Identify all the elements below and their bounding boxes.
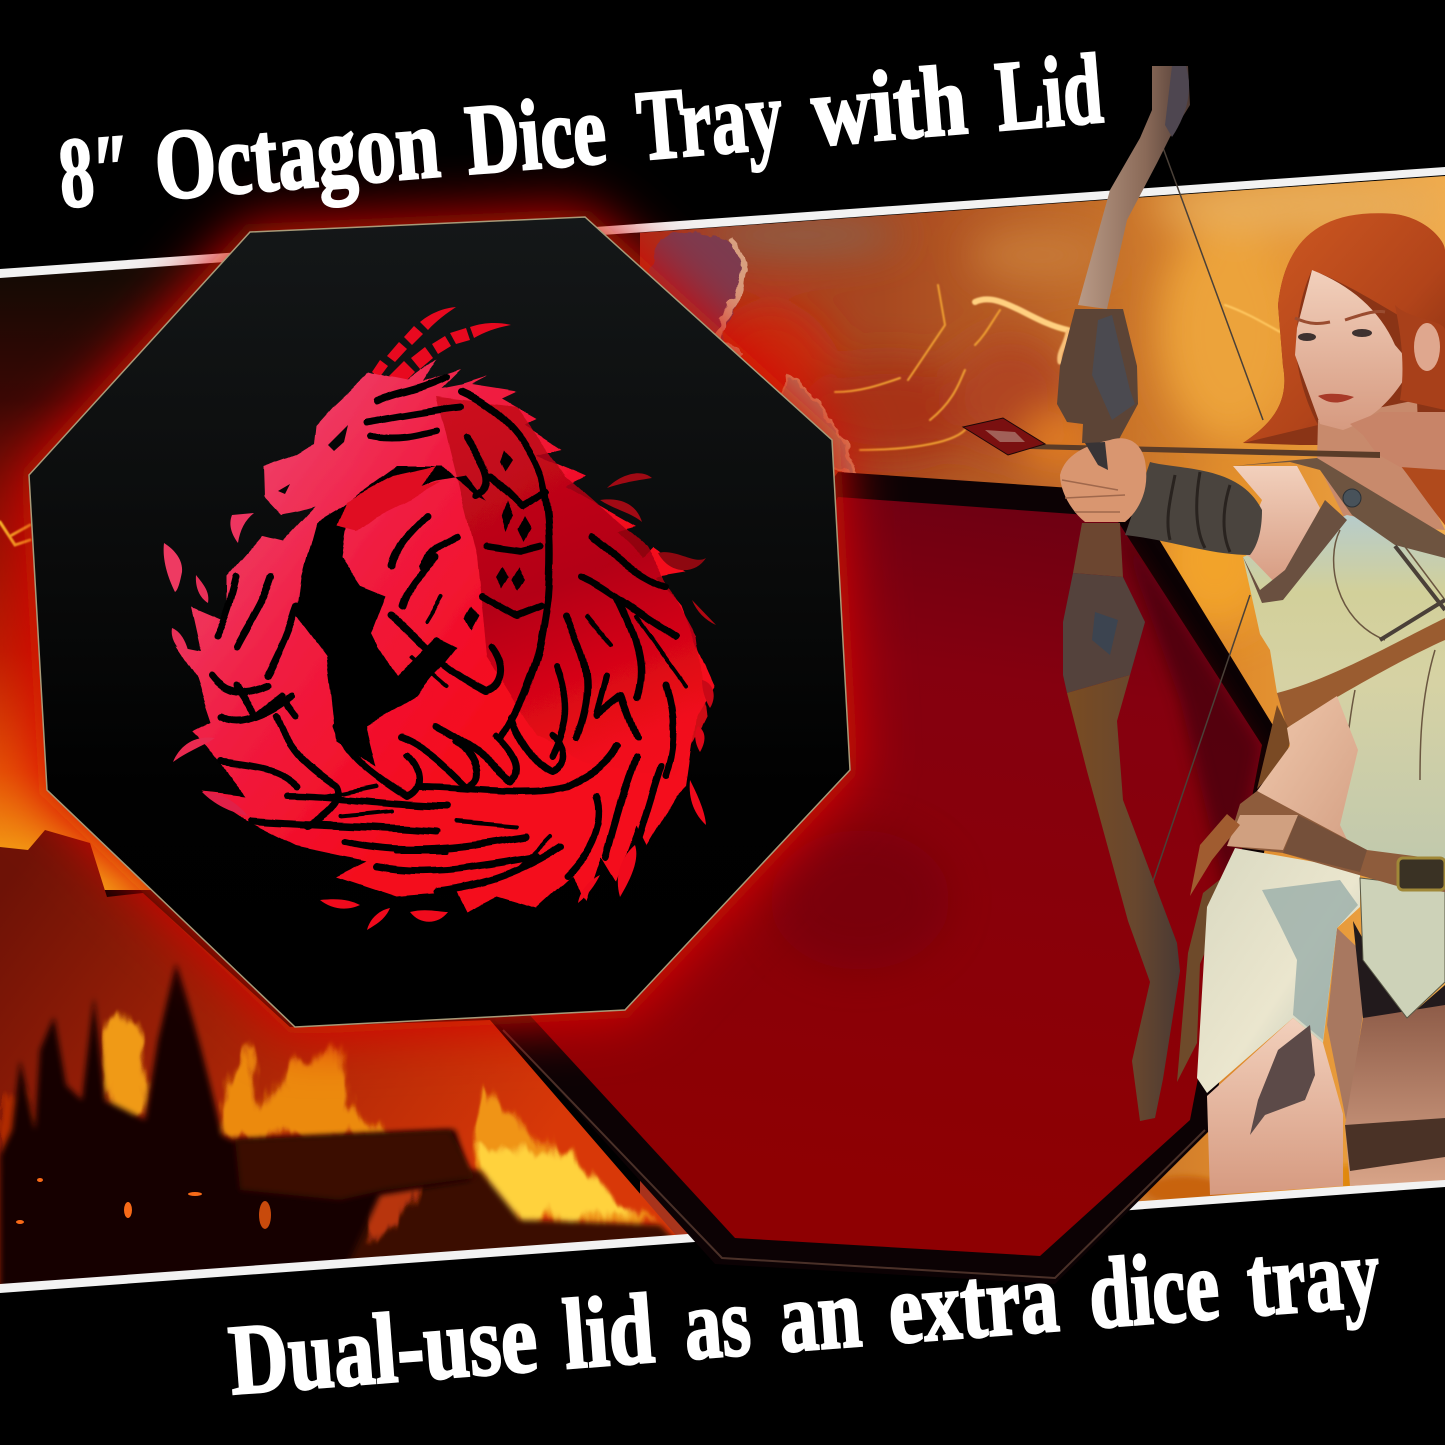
face features — [1295, 312, 1385, 403]
leg garter — [1345, 1118, 1445, 1171]
volcanic mountain ground — [0, 830, 680, 1290]
ember sparks — [16, 1178, 271, 1229]
chest harness lines — [1334, 530, 1445, 830]
band border: top white line — [0, 167, 1445, 278]
belt buckle — [1398, 858, 1445, 890]
left sky — [0, 170, 640, 890]
fire flames — [0, 1015, 660, 1225]
heading: bottom caption: an — [775, 1257, 865, 1374]
dragon thin flame details — [326, 596, 686, 872]
lower riser shine — [1092, 612, 1118, 655]
dragon horns — [372, 307, 511, 384]
riser detail — [1092, 315, 1135, 420]
heading: bottom caption: as — [680, 1265, 754, 1381]
lower dark fire ground — [346, 1166, 676, 1259]
dragon body scale patterns — [464, 452, 532, 632]
heading: bottom caption: extra — [884, 1242, 1062, 1365]
draw hand — [1350, 412, 1445, 470]
heading: top title: Lid — [992, 33, 1106, 152]
heading: top title: Tray — [633, 59, 786, 182]
collar harness — [1380, 546, 1445, 640]
heading: bottom caption — [225, 1217, 1383, 1416]
dragon eye and nostril — [278, 425, 348, 494]
band border: bottom white line — [0, 1179, 1445, 1293]
octagon red glow — [29, 217, 850, 1027]
skirt left panel — [1197, 848, 1360, 1093]
heading: bottom caption: dice — [1085, 1229, 1223, 1350]
thigh right — [1345, 1005, 1445, 1186]
bow hand — [1060, 438, 1146, 522]
bow hand grip — [1085, 442, 1108, 470]
arrow head highlight — [985, 430, 1025, 442]
purple storm cloud — [640, 232, 855, 472]
tray dark rim — [495, 472, 1285, 1284]
heading: bottom caption: tray — [1243, 1217, 1383, 1338]
tray inner shadow — [1115, 517, 1262, 910]
panel: black octagon dice tray — [29, 217, 850, 1027]
rib strap — [1277, 618, 1445, 728]
lower bow limb — [1067, 675, 1180, 1121]
octagon body — [29, 217, 850, 1027]
tray red felt — [525, 497, 1262, 1256]
bracer — [1125, 462, 1262, 555]
shoulder strap — [1233, 458, 1445, 558]
bow grip — [1073, 523, 1123, 577]
heading: top title — [55, 33, 1106, 229]
upper bow limb — [1078, 66, 1190, 309]
flying flame embers — [164, 473, 716, 930]
side strap — [1243, 500, 1347, 603]
illustration: archer with bow — [963, 66, 1445, 1195]
tray felt shade — [770, 830, 950, 970]
dragon body and flames — [176, 358, 714, 912]
hair front — [1243, 213, 1445, 443]
panel: fantasy landscape band — [0, 170, 1445, 1295]
arrow head — [963, 418, 1045, 455]
heading: top title: with — [807, 44, 971, 167]
dragon jaw flame — [336, 466, 442, 532]
bow string — [1150, 145, 1263, 890]
thigh inner — [1327, 928, 1363, 1125]
side brown strip — [1257, 705, 1292, 789]
belt — [1227, 791, 1445, 892]
foreground dark shade rocks — [235, 1130, 475, 1200]
lower small flames — [364, 1186, 424, 1246]
icon: red foil dragon emblem — [164, 307, 716, 930]
fingers — [1062, 480, 1125, 512]
dark spires and foreground rocks — [0, 963, 470, 1295]
belt pouch — [1283, 815, 1367, 872]
shorts dark — [1353, 921, 1445, 1018]
right distant fire — [1145, 1165, 1360, 1204]
bow upper riser — [1057, 309, 1138, 443]
dragon black flame lines — [212, 376, 676, 892]
chest armor — [1243, 515, 1445, 885]
heading: bottom caption: lid — [559, 1273, 657, 1390]
dragon neck shade — [436, 396, 706, 776]
upper arm — [1233, 466, 1320, 588]
right sky — [640, 170, 1445, 1290]
bracer wraps — [1168, 472, 1230, 552]
strap buckle — [1343, 489, 1361, 507]
arrow shaft — [1030, 444, 1380, 458]
thigh left — [1207, 1018, 1343, 1195]
skirt shade — [1262, 880, 1358, 1040]
skirt right panel — [1360, 878, 1445, 1018]
upper bow tip — [1165, 66, 1189, 137]
belt light band — [1227, 815, 1298, 850]
dragon black negative space — [296, 466, 486, 766]
thigh pouch — [1250, 1025, 1315, 1135]
face — [1295, 270, 1413, 430]
ear — [1414, 323, 1440, 371]
tray rim highlight — [503, 1030, 1205, 1278]
heading: top title: 8″ — [55, 113, 136, 229]
hair lower right — [1400, 465, 1445, 525]
belt tool — [1190, 814, 1240, 896]
heading: top title: Dice — [461, 74, 610, 196]
bright cloud edges and lightning — [0, 285, 1280, 545]
heading: bottom caption: Dual-use — [225, 1282, 541, 1416]
hair back — [1243, 214, 1445, 525]
hair side strand — [1395, 305, 1445, 410]
heading: top title: Octagon — [150, 87, 444, 221]
skirt brown drape — [1177, 853, 1253, 1082]
waist skin — [1257, 696, 1358, 850]
panel: red felt tray lid — [495, 472, 1285, 1284]
bow lower riser — [1063, 573, 1145, 693]
neck and upper chest — [1317, 400, 1445, 530]
sky tonal clouds — [700, 179, 1445, 630]
dragon head and mane — [176, 358, 714, 912]
